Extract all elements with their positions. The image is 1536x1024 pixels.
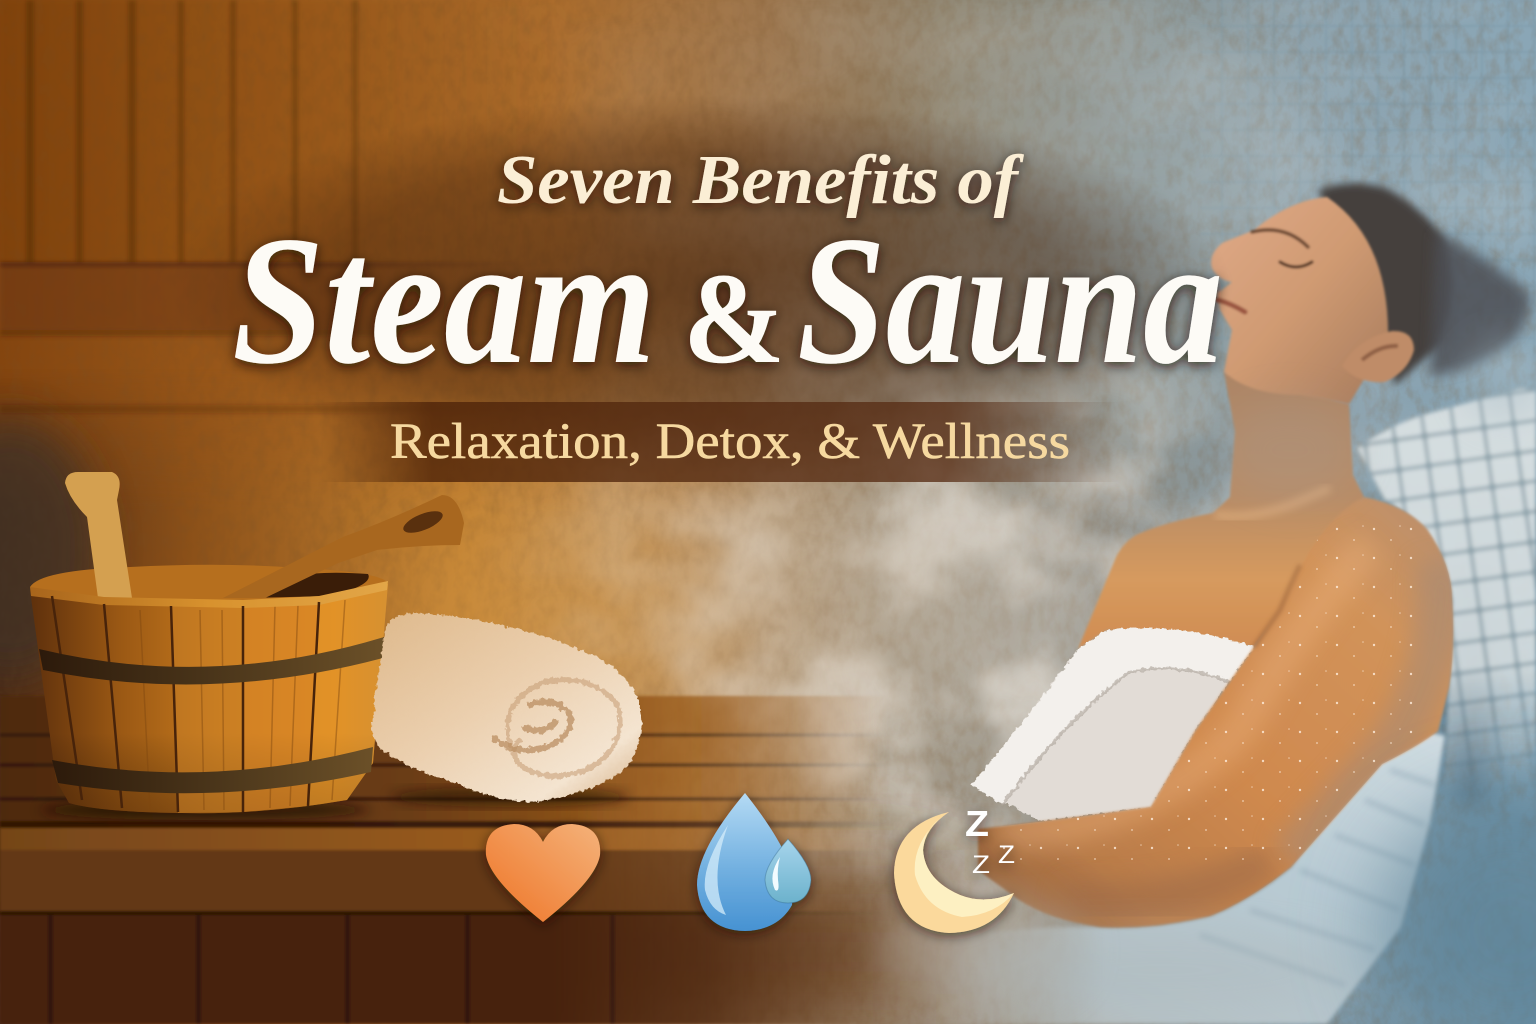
top hoop — [39, 637, 384, 684]
lips — [1218, 300, 1245, 312]
angled ladle — [223, 495, 464, 598]
neck and chest — [1078, 372, 1364, 649]
wood grain — [140, 600, 345, 810]
subtitle text: Relaxation, Detox, & Wellness — [390, 414, 1070, 470]
closed eye — [1280, 262, 1312, 267]
arm — [978, 497, 1453, 928]
hair — [1318, 183, 1530, 385]
eyebrow — [1252, 230, 1308, 247]
shaded floor under the icons — [480, 880, 950, 1024]
title line: Steam & Sauna: & — [683, 247, 785, 391]
illustration: relaxing woman in towel — [880, 183, 1536, 1024]
title backdrop shade — [170, 95, 1230, 475]
water droplets on skin — [1000, 520, 1420, 860]
dark interior shadow — [245, 573, 369, 598]
title line: Steam & Sauna: Steam — [232, 198, 656, 402]
icon: heart — [486, 824, 600, 922]
icon: crescent moon with Zzz: Z — [965, 803, 989, 844]
chest towel — [971, 628, 1254, 821]
bucket rim — [30, 581, 388, 608]
title line: Seven Benefits of: Seven Benefits of — [497, 142, 1025, 219]
title line: Steam & Sauna: Sauna — [797, 198, 1223, 402]
cushion — [1356, 386, 1536, 782]
arm and chest crease — [1254, 565, 1300, 647]
collarbone highlight — [1215, 488, 1330, 516]
interior of bucket — [30, 565, 388, 604]
upright ladle handle — [65, 472, 132, 598]
foreground steam over figure — [880, 340, 1536, 1024]
face — [1211, 197, 1414, 404]
lower hoop — [52, 747, 373, 793]
subtitle band — [320, 402, 1120, 482]
steam clouds — [531, 0, 1534, 906]
icon: wooden bucket with ladle — [30, 472, 464, 820]
wall shadow — [1446, 550, 1494, 810]
lighter staves — [171, 602, 243, 813]
lower towel — [952, 732, 1447, 1024]
wooden bench — [0, 696, 900, 1024]
icon: rolled towel — [372, 613, 642, 807]
stave seams — [52, 596, 319, 812]
icon: crescent moon with Zzz: Z — [972, 851, 990, 879]
bucket body — [30, 584, 388, 813]
ear — [1342, 331, 1414, 382]
icon: crescent moon with Zzz — [894, 803, 1015, 933]
icon: crescent moon with Zzz: Z — [998, 841, 1015, 869]
sauna wood wall planks — [0, 0, 484, 414]
title — [232, 142, 1223, 402]
icon: water drops — [697, 793, 811, 931]
title line: Steam & Sauna — [232, 198, 1223, 402]
